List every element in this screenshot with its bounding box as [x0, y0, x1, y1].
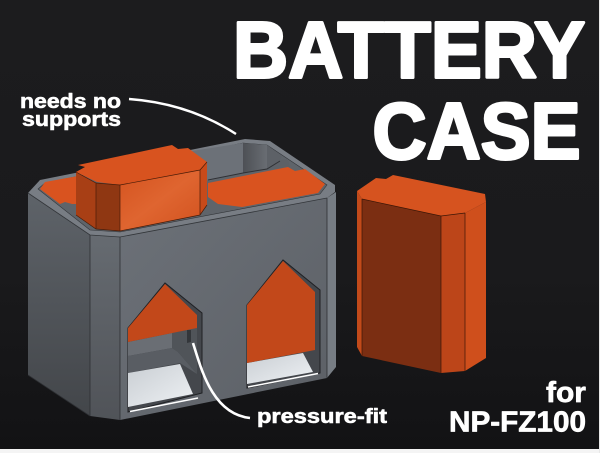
callout text: pressure-fit	[257, 406, 387, 428]
front chamfer	[90, 235, 120, 420]
battery inserted in case	[76, 145, 207, 231]
subtitle: NP-FZ100	[449, 406, 586, 438]
subtitle: for	[546, 377, 586, 409]
case body	[28, 139, 336, 420]
orange battery in window	[247, 261, 315, 363]
orange battery in window	[128, 284, 197, 342]
front face	[120, 198, 327, 420]
left window	[128, 283, 202, 412]
callout: pressure-fit	[193, 343, 387, 428]
callout text: needs no	[20, 91, 121, 113]
left face	[28, 193, 90, 416]
arrow line	[193, 343, 250, 418]
loose battery	[357, 175, 486, 373]
top rim	[28, 139, 335, 237]
callout: needs no supports	[20, 91, 236, 134]
title: BATTERY	[233, 6, 585, 94]
title: CASE	[372, 86, 580, 176]
orange cells in case top	[40, 176, 78, 204]
right window	[247, 260, 320, 388]
top face	[76, 145, 207, 185]
title	[233, 6, 585, 176]
floor seen through window	[128, 364, 193, 407]
arrow line	[129, 99, 236, 134]
callout: needs no supports: supports	[22, 109, 121, 131]
back walls of case	[192, 143, 243, 181]
subtitle	[449, 377, 586, 438]
inner floor	[38, 143, 327, 232]
right chamfer	[327, 192, 336, 378]
